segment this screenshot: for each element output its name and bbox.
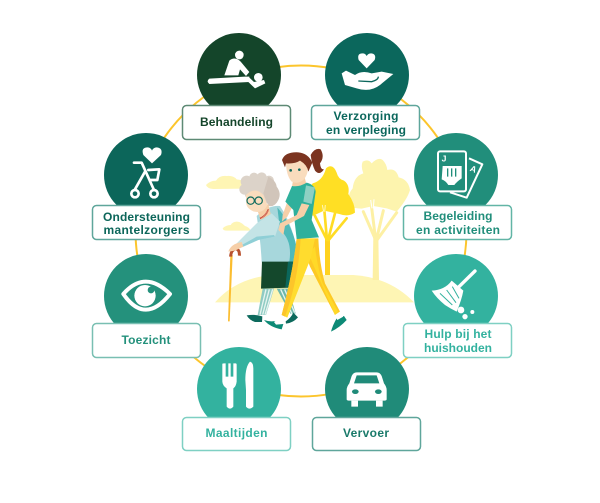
icon: playing cards: J — [442, 154, 447, 164]
label: Ondersteuning mantelzorgers — [103, 210, 190, 237]
label: Toezicht: Toezicht — [122, 333, 170, 347]
skirt — [261, 262, 297, 289]
panel: Verzorging en verpleging — [312, 33, 420, 140]
panel: Maaltijden — [182, 347, 290, 450]
hair — [239, 172, 275, 205]
label: Hulp bij het huishouden — [424, 327, 492, 355]
label: Verzorging en verpleging: en verpleging — [326, 123, 406, 137]
icon: broom with dust — [432, 271, 475, 319]
hair and ponytail — [282, 152, 312, 172]
neck — [292, 175, 307, 188]
icon: massage treatment — [208, 51, 265, 88]
rear yellow leg — [305, 238, 340, 315]
label: Begeleiding en activiteiten: en activiteiten — [416, 223, 500, 237]
label: Hulp bij het huishouden: Hulp bij het — [424, 327, 492, 341]
label: Behandeling: Behandeling — [200, 115, 273, 129]
label: Begeleiding en activiteiten — [416, 209, 500, 237]
panel: Begeleiding en activiteiten — [404, 133, 512, 240]
front yellow leg — [282, 238, 315, 318]
label: Maaltijden: Maaltijden — [206, 426, 268, 440]
panel: Toezicht — [92, 254, 200, 358]
teal shirt — [285, 183, 319, 239]
label: Verzorging en verpleging: Verzorging — [334, 109, 398, 123]
icon: car — [347, 372, 387, 407]
panel: Hulp bij het huishouden — [404, 254, 512, 358]
panel: Vervoer — [312, 347, 420, 450]
icon: hand holding a heart — [342, 53, 393, 90]
panel: Ondersteuning mantelzorgers — [92, 133, 200, 240]
jacket — [257, 206, 299, 262]
label: Hulp bij het huishouden: huishouden — [424, 341, 492, 355]
panel: Behandeling — [182, 33, 290, 140]
elderly woman — [228, 172, 299, 324]
central illustration: nurse walking with elderly woman in a park — [206, 149, 414, 332]
label: Ondersteuning mantelzorgers: Ondersteuning — [103, 210, 190, 224]
icon: heart above rollator — [131, 147, 162, 197]
label: Vervoer: Vervoer — [343, 426, 389, 440]
face — [286, 160, 308, 183]
icon: playing cards: A — [469, 163, 479, 175]
nurse — [264, 149, 347, 332]
shoes — [247, 315, 262, 322]
shoes — [264, 320, 283, 329]
striped legs — [258, 289, 274, 315]
label: Ondersteuning mantelzorgers: mantelzorgers — [104, 223, 190, 237]
rear arm — [282, 202, 293, 222]
pale yellow tree — [349, 159, 410, 280]
icon: playing cards — [438, 151, 482, 198]
label: Verzorging en verpleging — [326, 109, 406, 137]
icon: fork and knife — [222, 362, 253, 409]
label: Begeleiding en activiteiten: Begeleiding — [424, 209, 492, 223]
icon: eye — [123, 282, 170, 310]
bright yellow tree — [307, 166, 355, 275]
glasses — [247, 197, 262, 204]
background: clouds and hill — [206, 176, 414, 302]
neck, necklace and face — [257, 204, 271, 220]
cane — [228, 249, 239, 321]
hand on cane — [228, 242, 243, 252]
front arm and hand — [278, 203, 309, 235]
